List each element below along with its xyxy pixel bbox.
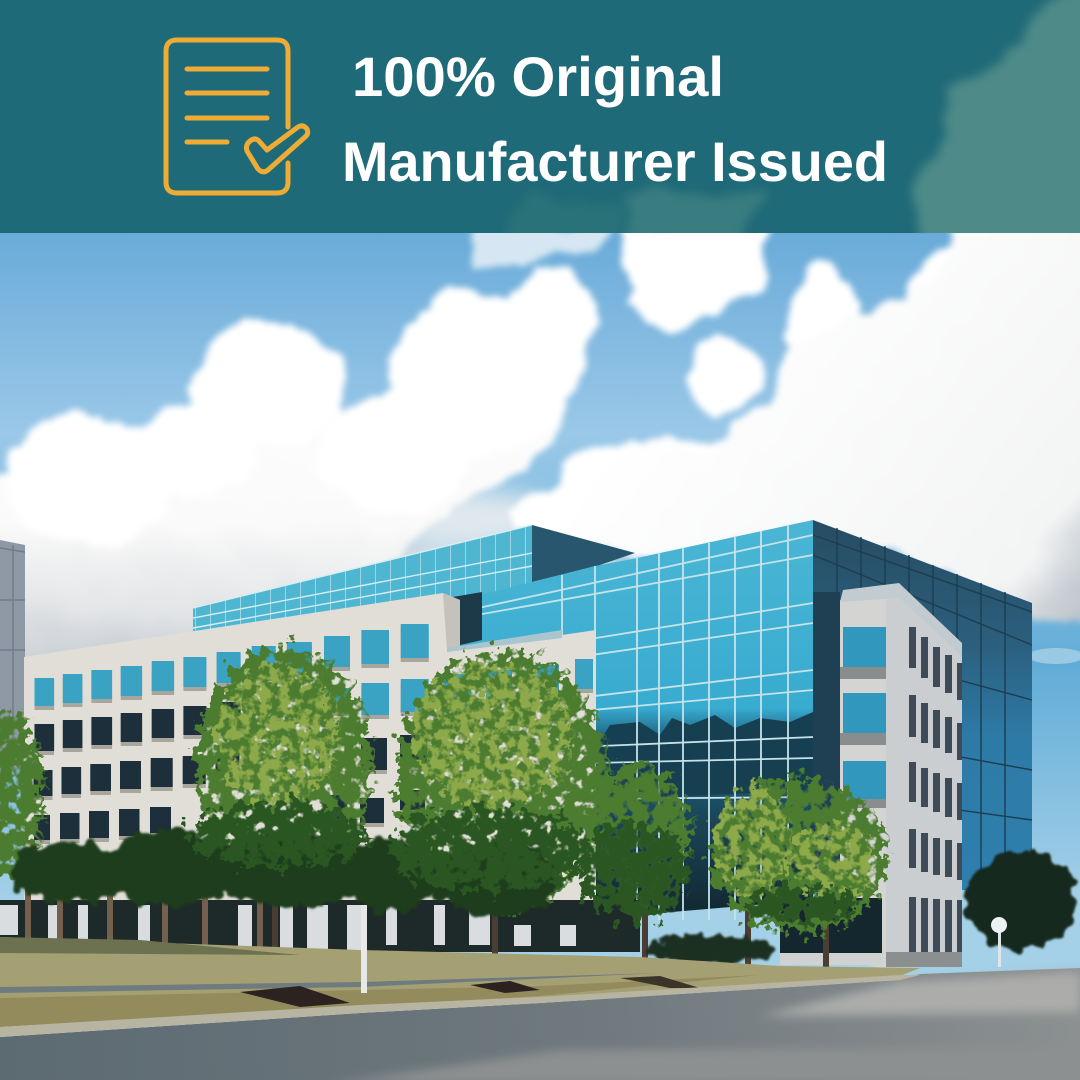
icon: document with check mark [166, 40, 308, 193]
title line 2: Manufacturer Issued [342, 130, 888, 193]
glass side [813, 520, 1032, 890]
photo: glass office building [0, 520, 1032, 968]
corner stone tower [780, 583, 962, 968]
white post [361, 905, 367, 993]
header: cloud showing through [509, 0, 1080, 233]
glass dark rear block [532, 525, 635, 582]
title line 1: 100% Original [352, 45, 724, 108]
mid-green crowns [0, 647, 888, 933]
dark recess between wing and glass [447, 592, 482, 648]
background dark tree at right [964, 850, 1076, 950]
photo: street sign [991, 917, 1007, 967]
photo: lawn [0, 905, 920, 1027]
sunlit crowns [218, 663, 879, 898]
shaded lower crowns [190, 803, 855, 923]
photo: clouds [0, 220, 1080, 670]
dark glass strip beside tower [813, 592, 840, 892]
dark tree row [8, 830, 560, 918]
stone wing [24, 593, 596, 905]
glass upper roof block [193, 525, 532, 635]
photo: distant left building [0, 540, 25, 770]
trunks [28, 850, 826, 985]
header band [0, 0, 1080, 260]
photo: trees [0, 647, 1076, 985]
photo: road [0, 968, 1080, 1080]
hedge [646, 935, 774, 965]
ground floor columns [0, 900, 640, 952]
glass main front [460, 520, 813, 930]
